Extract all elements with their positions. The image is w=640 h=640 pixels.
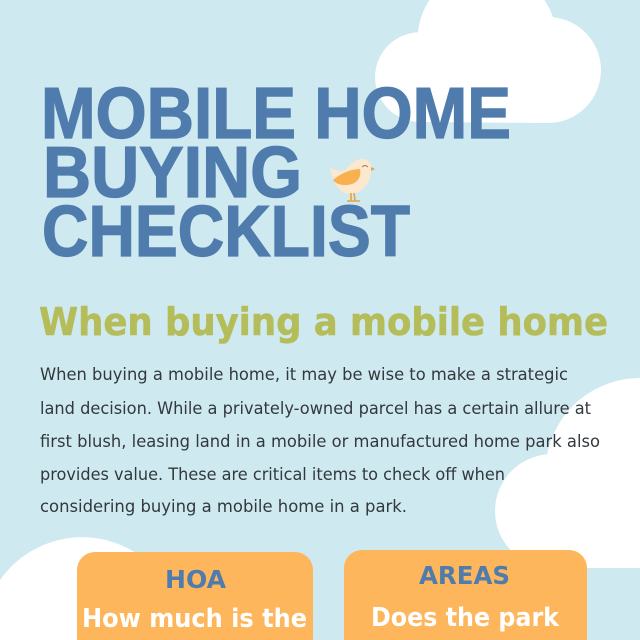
cloud: top right [375,0,601,123]
cloud: bottom left [0,537,182,640]
card text: HOA question: How much is the [82,604,307,634]
title: MOBILE HOME [41,74,511,154]
title: BUYING [43,133,302,213]
card: HOA [77,552,313,640]
card text: Areas question: Does the park [371,603,560,633]
card heading: HOA: HOA [165,565,227,594]
body paragraph: provides value. These are critical items to check off when [40,465,505,484]
card heading: Areas: AREAS [419,561,510,590]
card: Areas [344,550,587,640]
title [41,74,511,272]
body paragraph: first blush, leasing land in a mobile or manufactured home park also [40,432,600,451]
body paragraph [40,365,600,516]
cloud: middle right [495,378,640,568]
subtitle: When buying a mobile home [39,300,608,344]
title: CHECKLIST [42,192,410,272]
body paragraph: land decision. While a privately-owned parcel has a certain allure at [40,399,592,418]
icon: bird [330,159,375,201]
body paragraph: When buying a mobile home, it may be wise to make a strategic [40,365,568,384]
body paragraph: considering buying a mobile home in a park. [40,497,407,516]
